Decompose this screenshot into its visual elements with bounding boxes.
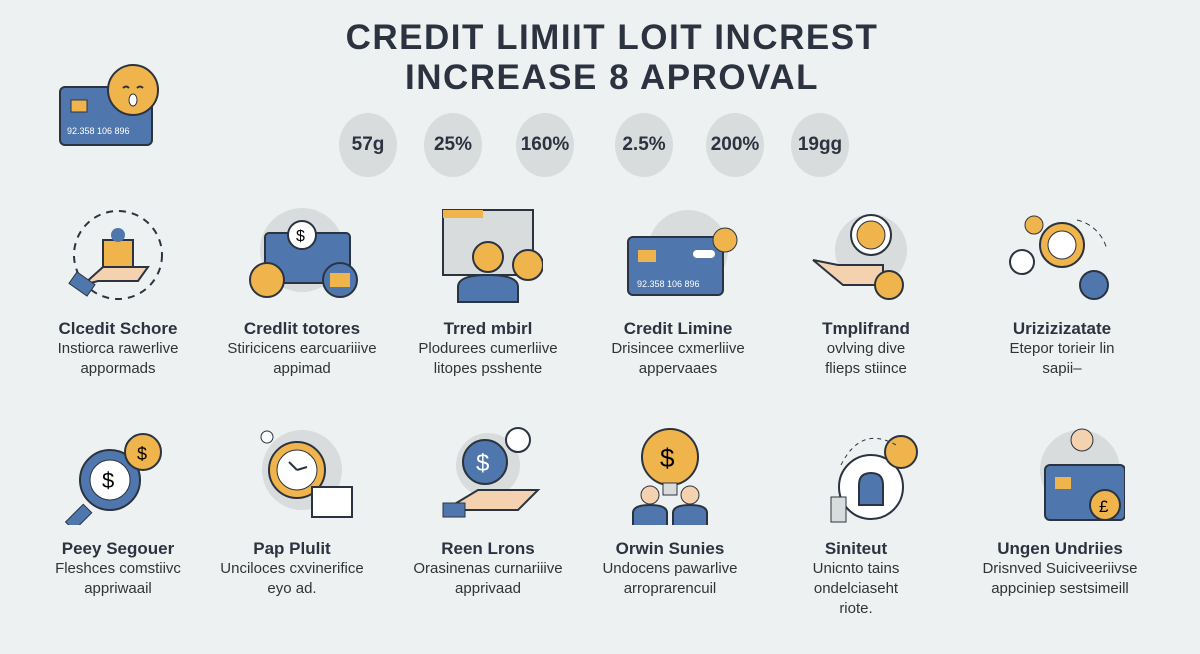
row2 item4: $ [660,443,675,473]
text: 2.5% [622,134,666,155]
row1 item5: Tmplifrand [822,319,910,338]
row2 item3: apprivaad [455,580,521,597]
text: 160% [521,134,569,155]
row1 item2: appimad [273,360,331,377]
row1 item6: sapii– [1042,360,1082,377]
text: 25% [434,134,472,155]
row1 item1: Instiorca rawerlive [58,340,178,357]
row2 item3: $ [476,450,489,477]
row2 item3: Reen Lrons [441,539,535,558]
row1 item3: Trred mbirl [444,319,532,338]
stats circles [339,113,849,177]
row1 item4: 92.358 106 896 [637,279,700,289]
row2 item6 [982,428,1138,597]
row2 item3 [413,427,563,597]
row2 item1: appriwaail [84,580,152,597]
row1 item4: appervaaes [639,360,717,377]
row2 item6: £ [1099,497,1109,516]
row2 item4: Undocens pawarlive [602,560,738,577]
row1 item2 [227,208,377,377]
row2 item2: Pap Plulit [253,539,331,558]
row1 item2: Credlit totores [244,319,360,338]
row1 item1: appormads [80,360,156,377]
row1 item2: Stiricicens earcuariiive [227,340,377,357]
row1 item4: Drisincee cxmerliive [611,340,745,357]
row1 item6: Etepor torieir lin [1009,340,1115,357]
row1 item3: litopes psshente [434,360,542,377]
row1 item2: $ [296,228,305,245]
text: 57g [352,134,384,155]
row2 item5: Unicnto tains [813,560,899,577]
row2 item1: $ [137,444,147,464]
row2 item6: appciniep sestsimeill [991,580,1129,597]
row2 item2: eyo ad. [267,580,317,597]
row2 item1 [55,433,181,597]
text: 19gg [798,134,842,155]
row1 item5: flieps stiince [825,360,907,377]
row2 item2: Unciloces cxvinerifice [220,560,364,577]
row2 item6: Drisnved Suiciveeriivse [982,560,1138,577]
row2 item5: ondelciaseht [814,580,898,597]
logo: card with sun [59,64,159,146]
row1 item3: Plodurees cumerliive [418,340,558,357]
row2 item4 [602,428,738,597]
text: 200% [711,134,759,155]
row2 item1: Fleshces comstiivc [55,560,181,577]
row2 item2 [220,430,364,597]
row1 item5: ovlving dive [827,340,905,357]
logo: card with sun: 92.358 106 896 [67,126,130,136]
title: CREDIT LIMIIT LOIT INCREST [346,18,878,57]
row2 item3: Orasinenas curnariiive [413,560,563,577]
row2 item5 [813,435,918,617]
row2 item1: Peey Segouer [62,539,174,558]
row1 item6 [1009,216,1115,377]
title [346,18,878,97]
row1 item3 [418,209,558,377]
row1 item5 [812,214,910,377]
row2 item6: Ungen Undriies [997,539,1123,558]
row1 item6: Urizizizatate [1013,319,1111,338]
row1 item1: Clcedit Schore [58,319,178,338]
row1 item4 [611,210,745,377]
row1 item4: Credit Limine [624,319,732,338]
row2 item5: riote. [839,600,873,617]
row2 item1: $ [102,468,114,493]
row2 item5: Siniteut [825,539,887,558]
row1 item1 [58,210,178,377]
row2 item4: arroprarencuil [624,580,716,597]
title: INCREASE 8 APROVAL [405,58,819,97]
row2 item4: Orwin Sunies [616,539,724,558]
